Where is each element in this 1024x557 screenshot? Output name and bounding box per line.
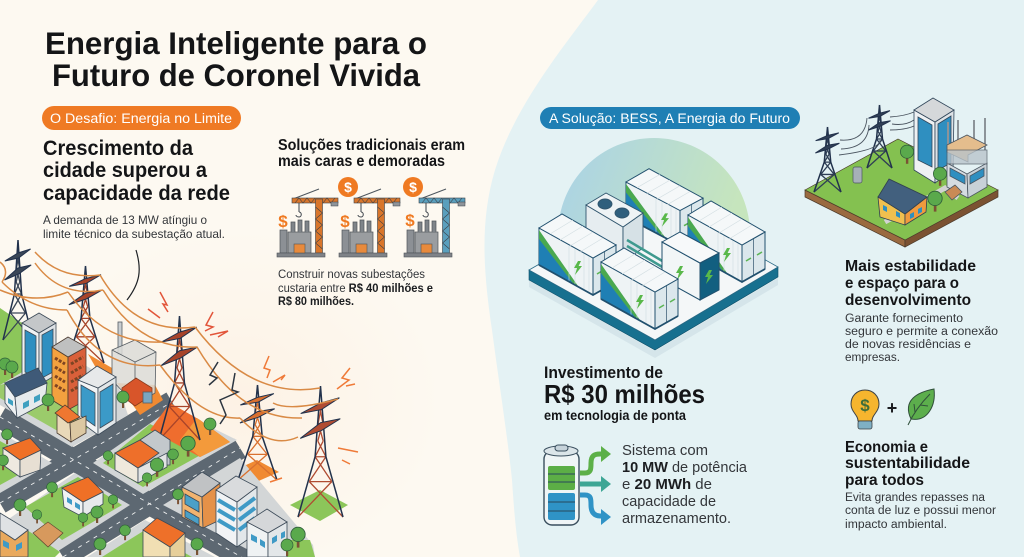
ground	[805, 139, 998, 247]
heading: economia	[845, 439, 970, 489]
pill: o desafio: O Desafio: Energia no Limite	[50, 111, 232, 126]
icons: cranes and substations	[277, 177, 465, 257]
transformer	[853, 167, 862, 183]
dollar signs: $	[340, 212, 350, 231]
container right	[688, 201, 765, 282]
text: sistema	[622, 443, 748, 527]
container front	[601, 248, 678, 329]
tower 4	[238, 385, 277, 480]
house: large with orange roof	[115, 430, 170, 483]
building: white	[247, 509, 287, 557]
pill: a solução	[540, 107, 800, 129]
house: orange roof left	[3, 438, 41, 477]
heading: economia: sustentabilidade	[845, 455, 970, 472]
orange and green ground pads	[0, 308, 348, 521]
panel: a solução	[529, 98, 998, 531]
trees	[900, 145, 947, 212]
investment text: em tecnologia de ponta	[544, 407, 686, 423]
title	[45, 25, 427, 93]
dollar signs	[278, 177, 423, 231]
building under construction	[945, 118, 987, 200]
house: orange roof center	[62, 477, 103, 517]
trees	[0, 358, 305, 556]
callout curve	[127, 250, 139, 300]
heading: crescimento: Crescimento da	[43, 137, 193, 160]
cooling unit	[586, 193, 643, 262]
text: sistema: 10 MW de potência	[622, 460, 748, 476]
text: sistema: Sistema com	[622, 443, 708, 459]
pill: o desafio	[42, 106, 241, 130]
house	[878, 179, 927, 225]
heading: soluções tradicionais: Soluções tradicionais eram	[278, 137, 465, 154]
crane 3	[404, 189, 465, 257]
substation under stress	[112, 322, 156, 406]
title: Futuro de Coronel Vivida	[52, 57, 420, 93]
text: demanda: A demanda de 13 MW atíngiu o	[43, 213, 207, 227]
container left	[539, 214, 616, 295]
building: bottom center	[143, 518, 185, 557]
investment text: R$ 30 milhões	[544, 379, 705, 409]
investment text	[544, 363, 705, 423]
inverter unit	[662, 232, 719, 300]
container rear	[626, 169, 703, 246]
text: garante fornecimento: de novas residências e	[845, 339, 971, 351]
text: evita repasses	[845, 492, 996, 531]
dollar signs: $	[278, 212, 288, 231]
arrows from battery	[580, 446, 611, 525]
construction materials	[33, 522, 63, 547]
icon: battery	[544, 445, 579, 525]
investment text: Investimento de	[544, 363, 663, 382]
heading: crescimento: cidade superou a	[43, 159, 207, 182]
tower 2	[67, 266, 104, 363]
heading: mais estabilidade: e espaço para o	[845, 275, 959, 292]
pipes	[627, 240, 664, 274]
tower 5	[298, 386, 343, 517]
text: sistema: e 20 MWh de	[622, 477, 712, 493]
text: custo subestações: R$ 80 milhões.	[278, 296, 354, 308]
heading: crescimento	[43, 137, 230, 205]
lightning sparks	[148, 292, 358, 482]
plus sign: +	[887, 398, 897, 418]
tower right	[867, 105, 892, 168]
text: demanda: limite técnico da subestação atual.	[43, 227, 225, 241]
heading: economia: para todos	[845, 472, 924, 489]
text: evita repasses: conta de luz e possui menor	[845, 505, 996, 517]
text: demanda	[43, 213, 225, 241]
tower 1	[3, 240, 33, 340]
building: blue-white	[78, 366, 116, 435]
crane 2	[339, 189, 400, 257]
title: Energia Inteligente para o	[45, 25, 427, 61]
panel: o desafio	[42, 106, 465, 308]
heading: soluções tradicionais	[278, 137, 465, 170]
heading: mais estabilidade: desenvolvimento	[845, 292, 971, 309]
icon: light bulb: $	[860, 396, 870, 415]
text: custo subestações: Construir novas subestações	[278, 269, 425, 281]
dollar signs: $	[409, 179, 417, 195]
tower left	[814, 127, 841, 192]
text: custo subestações	[278, 269, 433, 308]
heading: economia: Economia e	[845, 439, 928, 456]
power lines	[0, 252, 338, 441]
text: sistema: capacidade de	[622, 494, 716, 510]
text: garante fornecimento: seguro e permite a conexão	[845, 326, 998, 338]
roads	[0, 402, 250, 557]
heading: soluções tradicionais: mais caras e demoradas	[278, 153, 445, 170]
tower 3	[159, 316, 200, 440]
pill: a solução: A Solução: BESS, A Energia do Futuro	[549, 111, 790, 126]
building: bottom left	[0, 513, 28, 557]
house: blue roof	[5, 368, 47, 418]
heading: mais estabilidade: Mais estabilidade	[845, 258, 976, 275]
building: striped blue	[216, 476, 257, 547]
dollar signs: $	[344, 179, 352, 195]
house: small orange roof	[55, 405, 86, 442]
building: orange-blue	[182, 472, 220, 528]
text: custo subestações: custaria entre R$ 40 milhões e	[278, 283, 433, 295]
illustration: connected neighbourhood	[805, 98, 998, 247]
icon: leaf	[908, 389, 934, 425]
platform	[529, 198, 778, 358]
gradient backdrop circle	[558, 138, 750, 262]
wires	[839, 112, 914, 155]
text: garante fornecimento: empresas.	[845, 352, 900, 364]
text: garante fornecimento	[845, 313, 998, 364]
illustration: BESS site	[529, 138, 778, 358]
text: garante fornecimento: Garante fornecimento	[845, 313, 963, 325]
heading: mais estabilidade	[845, 258, 976, 309]
building: orange	[52, 337, 86, 410]
text: evita repasses: Evita grandes repasses na	[845, 492, 986, 504]
illustration: overloaded city grid	[0, 240, 358, 557]
icon: light bulb	[851, 390, 879, 429]
city blocks	[0, 350, 315, 557]
text: sistema: armazenamento.	[622, 511, 731, 527]
building: blue tower	[22, 313, 56, 385]
tall building	[914, 98, 954, 183]
text: evita repasses: impacto ambiental.	[845, 519, 947, 531]
dollar signs: $	[405, 211, 415, 230]
crane 1	[277, 189, 338, 257]
heading: crescimento: capacidade da rede	[43, 182, 230, 205]
